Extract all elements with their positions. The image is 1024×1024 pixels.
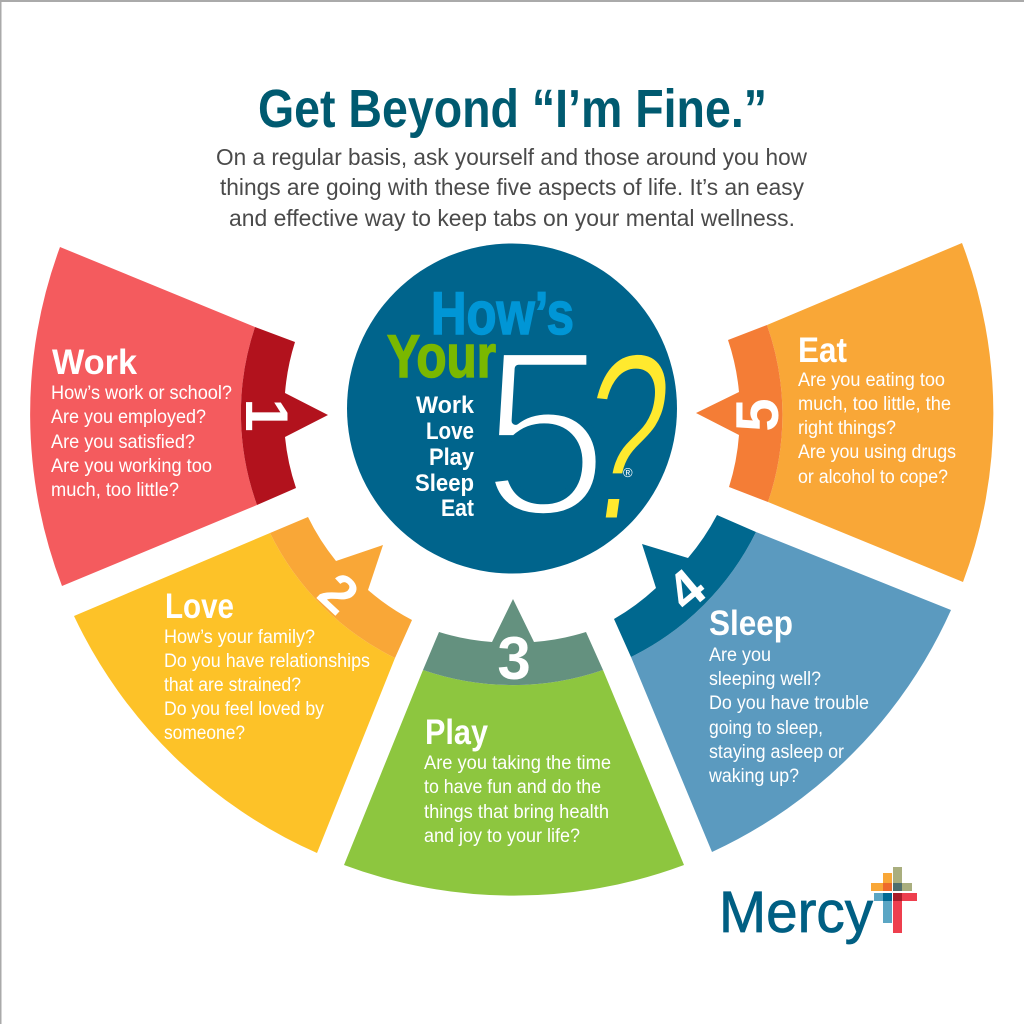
icon: cross: [871, 867, 917, 933]
eat questions: [798, 370, 956, 488]
registered mark: ®: [623, 465, 633, 480]
panel: sleep: [614, 515, 951, 852]
eat questions: right things?: [798, 418, 896, 439]
logo: Mercy: Mercy: [719, 880, 873, 945]
sleep questions: Do you have trouble: [709, 693, 869, 714]
panel: play: [344, 599, 684, 896]
list of five aspects: [415, 392, 475, 522]
heading: eat: Eat: [798, 331, 847, 370]
arrow: eat number 5: [696, 325, 782, 502]
number 3: 3: [497, 625, 531, 692]
heading: Your: Your: [387, 323, 496, 390]
eat questions: or alcohol to cope?: [798, 467, 948, 488]
love questions: Do you have relationships: [164, 651, 370, 672]
intro text block: [216, 144, 807, 231]
number 2: 2: [307, 562, 370, 626]
title: Get Beyond “I’m Fine.”: [258, 79, 767, 139]
central badge: How's Your 5?: [347, 244, 685, 574]
number 5: 5: [724, 398, 791, 432]
sleep questions: [708, 645, 869, 787]
panel: work: [30, 247, 328, 586]
heading: How's: How’s: [431, 280, 574, 347]
work questions: Are you employed?: [51, 407, 206, 428]
heading: work: Work: [52, 343, 138, 382]
play questions: things that bring health: [424, 802, 609, 823]
intro text block: On a regular basis, ask yourself and those around you how: [216, 144, 807, 170]
heading: sleep: Sleep: [709, 604, 793, 643]
arrow: play number 3: [423, 599, 603, 685]
sleep questions: going to sleep,: [709, 718, 823, 739]
heading: play: Play: [425, 713, 488, 752]
list of five aspects: Sleep: [415, 470, 474, 497]
love questions: [164, 627, 370, 744]
play questions: to have fun and do the: [424, 777, 601, 798]
big question mark: ?: [565, 303, 685, 571]
sleep questions: sleeping well?: [709, 669, 821, 690]
arrow: work number 1: [241, 327, 328, 505]
panel: eat: [696, 243, 993, 582]
work questions: How’s work or school?: [51, 383, 232, 404]
logo: Mercy: [719, 867, 917, 945]
list of five aspects: Work: [416, 392, 475, 419]
arrow: sleep number 4: [614, 515, 756, 657]
sleep questions: Are you: [709, 645, 771, 666]
list of five aspects: Play: [429, 444, 475, 471]
play questions: Are you taking the time: [424, 753, 611, 774]
eat questions: Are you using drugs: [798, 442, 956, 463]
love questions: How’s your family?: [164, 627, 315, 648]
eat questions: much, too little, the: [798, 394, 951, 415]
arrow: love number 2: [270, 517, 412, 658]
work questions: Are you satisfied?: [51, 432, 195, 453]
sleep questions: waking up?: [708, 766, 799, 787]
intro text block: and effective way to keep tabs on your mental wellness.: [229, 205, 795, 231]
list of five aspects: Eat: [441, 495, 474, 522]
heading: love: Love: [165, 587, 234, 626]
list of five aspects: Love: [426, 418, 474, 445]
love questions: someone?: [164, 723, 245, 744]
big numeral 5: 5: [481, 299, 609, 566]
number 4: 4: [656, 558, 717, 623]
number 1: 1: [233, 398, 300, 432]
panel: love: [74, 517, 412, 853]
love questions: Do you feel loved by: [164, 699, 324, 720]
work questions: [51, 383, 232, 501]
play questions: [424, 753, 611, 847]
sleep questions: staying asleep or: [709, 742, 845, 763]
intro text block: things are going with these five aspects of life. It’s an easy: [220, 174, 804, 200]
work questions: much, too little?: [51, 480, 179, 501]
love questions: that are strained?: [164, 675, 301, 696]
work questions: Are you working too: [51, 456, 212, 477]
eat questions: Are you eating too: [798, 370, 945, 391]
play questions: and joy to your life?: [424, 826, 580, 847]
